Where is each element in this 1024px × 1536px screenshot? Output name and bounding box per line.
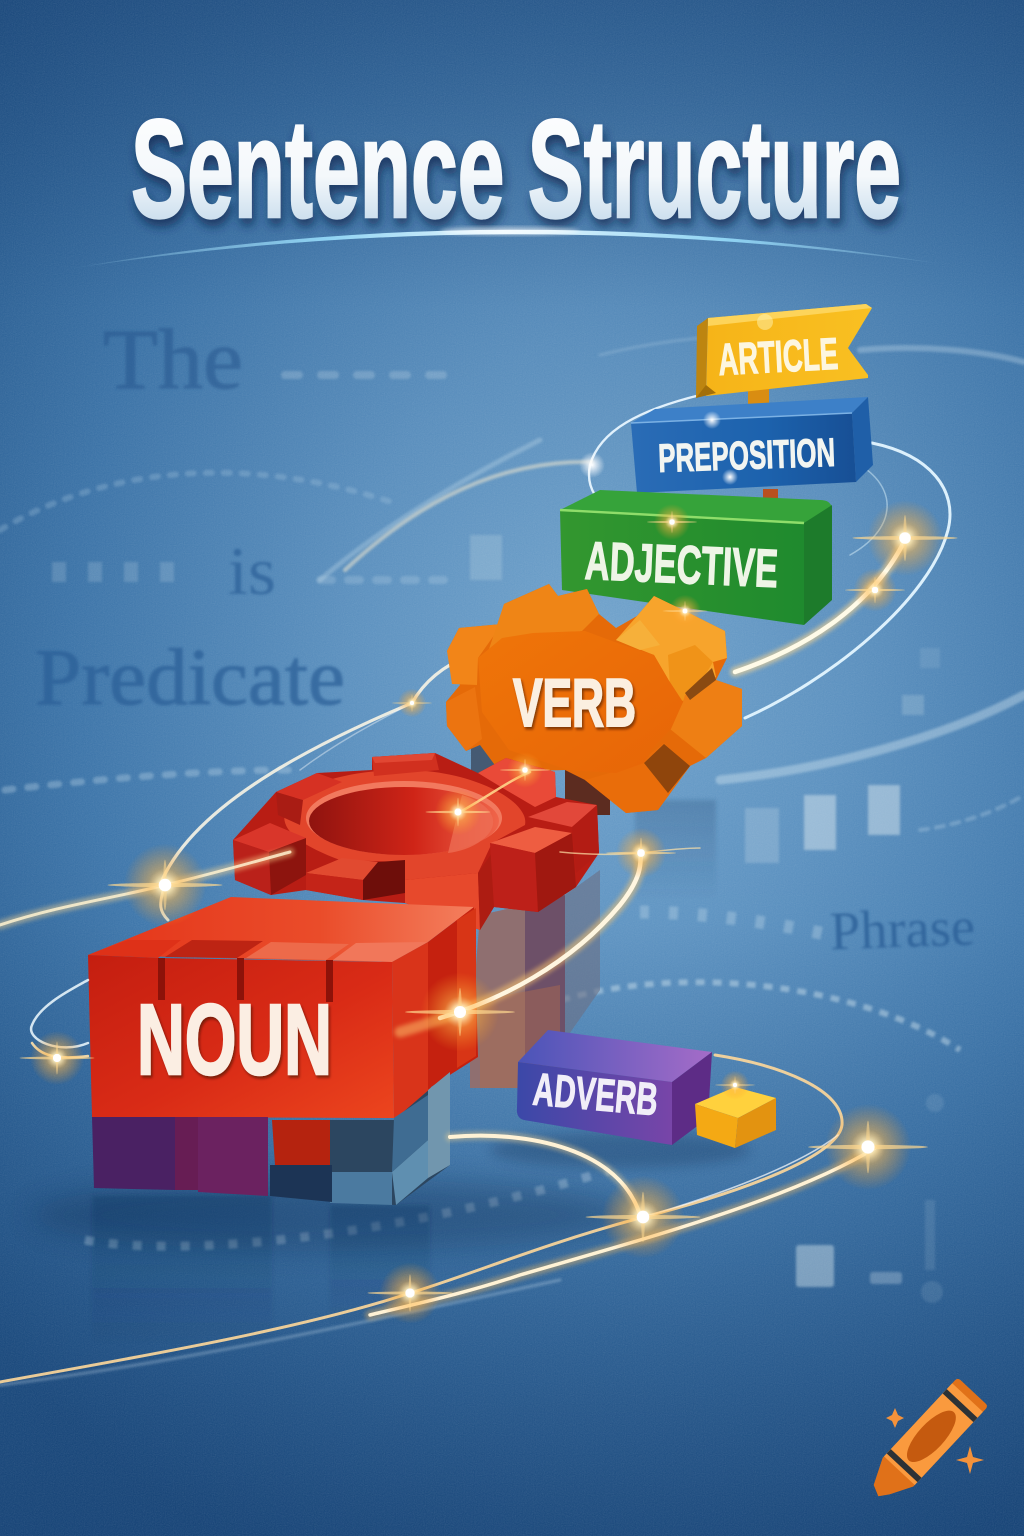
PREPOSITION block [631,397,873,499]
gear: red top gear [233,753,599,930]
ghost word: Phrase: Phrase [829,896,976,961]
bottom tooth [585,743,690,813]
upper-right tooth [478,758,556,807]
ghosted dashes and tiles [0,375,1024,1246]
upper-left tooth [276,773,342,800]
right tooth [528,802,597,827]
ADVERB block [517,1030,712,1145]
lower ribbon [450,1136,640,1215]
gear silhouette [446,584,742,813]
top face [88,897,474,962]
floor shadow and reflections [30,1132,750,1345]
article label: ARTICLE [717,328,839,385]
top tooth [487,584,599,655]
ghost word: is: is [228,533,276,609]
crayon logo [861,1377,988,1509]
top tooth [372,753,439,776]
front slots [158,958,165,1000]
ADJECTIVE block [560,490,832,625]
gear face [478,631,683,773]
gear hole [306,781,502,855]
adjective label: ADJECTIVE [584,531,779,599]
ARTICLE signpost flag [696,304,872,410]
noun label: NOUN [137,984,332,1096]
crayon body [861,1377,988,1509]
lower-left tooth [446,687,482,751]
ribbon near gear [0,852,290,925]
right tooth [670,680,742,758]
upper-left tooth [447,624,502,685]
gear silhouette [233,753,599,930]
lower purple blocks [92,1117,175,1190]
ribbon across noun block [400,850,641,1032]
NOUN block [88,897,478,1205]
front teeth tops [88,940,181,958]
lower blue block [330,1080,450,1205]
title swoosh underline [62,227,948,270]
front tooth [306,858,378,880]
swirl: foreground golden ribbons [0,772,875,1382]
right front tooth [490,827,572,853]
faint light bands [0,338,1024,1385]
signpost pole [748,388,769,410]
right side [392,942,428,1118]
verb label: VERB [513,665,636,741]
ghosted background words [35,311,976,961]
gear ring and body [284,770,525,880]
adverb label: ADVERB [531,1063,660,1125]
ghost word: The: The [103,311,243,407]
lower red block [272,1120,335,1165]
ghost word: Predicate: Predicate [35,634,345,722]
column blocks under gears [470,745,716,1088]
swirl: back loops behind the blocks [160,395,950,885]
preposition label: PREPOSITION [657,431,836,481]
front face [88,955,394,1118]
left tooth [233,823,306,852]
small yellow cube [695,1087,776,1148]
light sparks [20,314,958,1324]
star sparkles [886,1408,904,1428]
VERB gear [446,584,742,813]
top-right tooth [616,596,727,702]
left loop [31,980,88,1047]
